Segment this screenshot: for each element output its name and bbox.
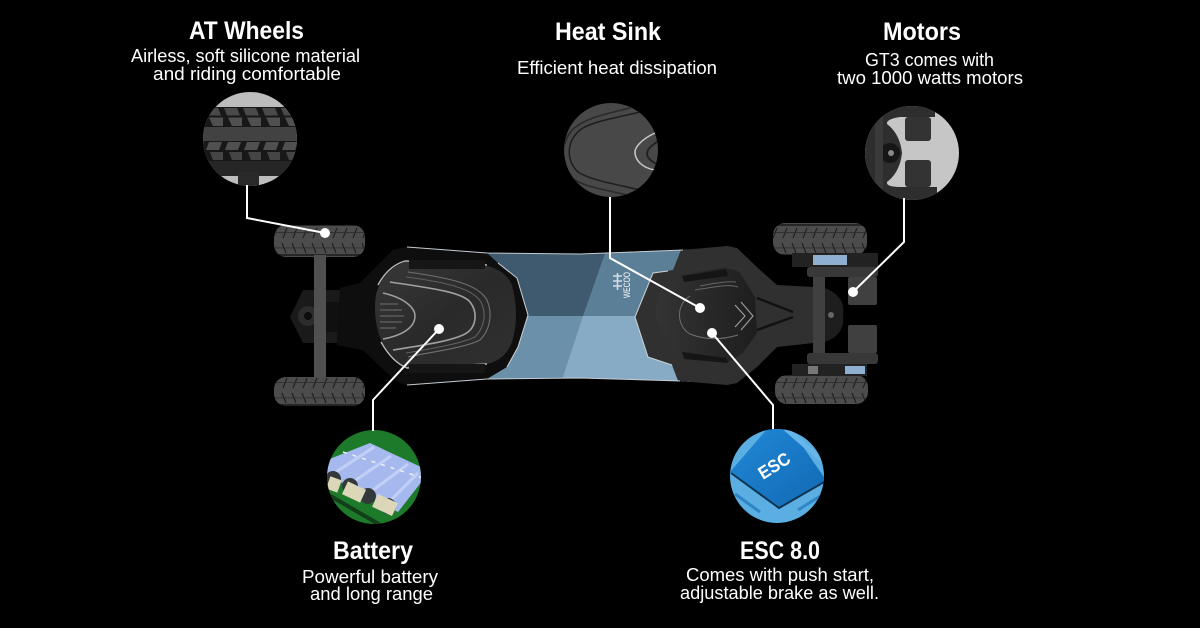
brand logo [613, 272, 632, 298]
description line 2: and riding comfortable [153, 64, 341, 84]
description line 1: Comes with push start, [686, 565, 874, 585]
leader line [373, 329, 439, 431]
brand logo: WECOO [622, 272, 632, 298]
description line 1: Airless, soft silicone material [131, 46, 360, 66]
heading: AT Wheels [189, 17, 304, 45]
battery detail circle [325, 430, 423, 526]
leader dot [848, 287, 858, 297]
leader dot [320, 228, 330, 238]
ESC detail circle: ESC [755, 448, 794, 483]
right truck and motors [773, 223, 878, 404]
description line 1: Powerful battery [302, 567, 438, 587]
leader dot [434, 324, 444, 334]
tire detail circle [203, 92, 297, 188]
description: Efficient heat dissipation [517, 58, 717, 78]
heading: Battery [333, 537, 413, 565]
heading: ESC 8.0 [740, 537, 820, 565]
callout: ESC [680, 328, 879, 603]
callout: Heat Sink [517, 18, 717, 313]
description line 2: and long range [310, 584, 433, 604]
description line 2: adjustable brake as well. [680, 583, 879, 603]
callout: Motors [837, 18, 1023, 297]
heading: Heat Sink [555, 18, 661, 46]
motor detail circle [865, 106, 961, 202]
deck [337, 245, 813, 386]
heading: Motors [883, 18, 961, 46]
leader dot [695, 303, 705, 313]
leader line [610, 197, 700, 308]
leader dot [707, 328, 717, 338]
leader line [853, 198, 904, 292]
ESC detail circle [729, 428, 826, 524]
leader line [712, 333, 773, 429]
leader line [247, 185, 325, 233]
heat sink detail circle [563, 103, 660, 199]
description line 2: two 1000 watts motors [837, 68, 1023, 88]
callout: AT Wheels [131, 17, 360, 238]
skateboard [274, 223, 878, 406]
heat sink cover [655, 268, 793, 363]
left truck [274, 225, 365, 406]
callout: Battery [302, 324, 444, 604]
description line 1: GT3 comes with [865, 50, 994, 70]
battery cover [375, 260, 516, 373]
